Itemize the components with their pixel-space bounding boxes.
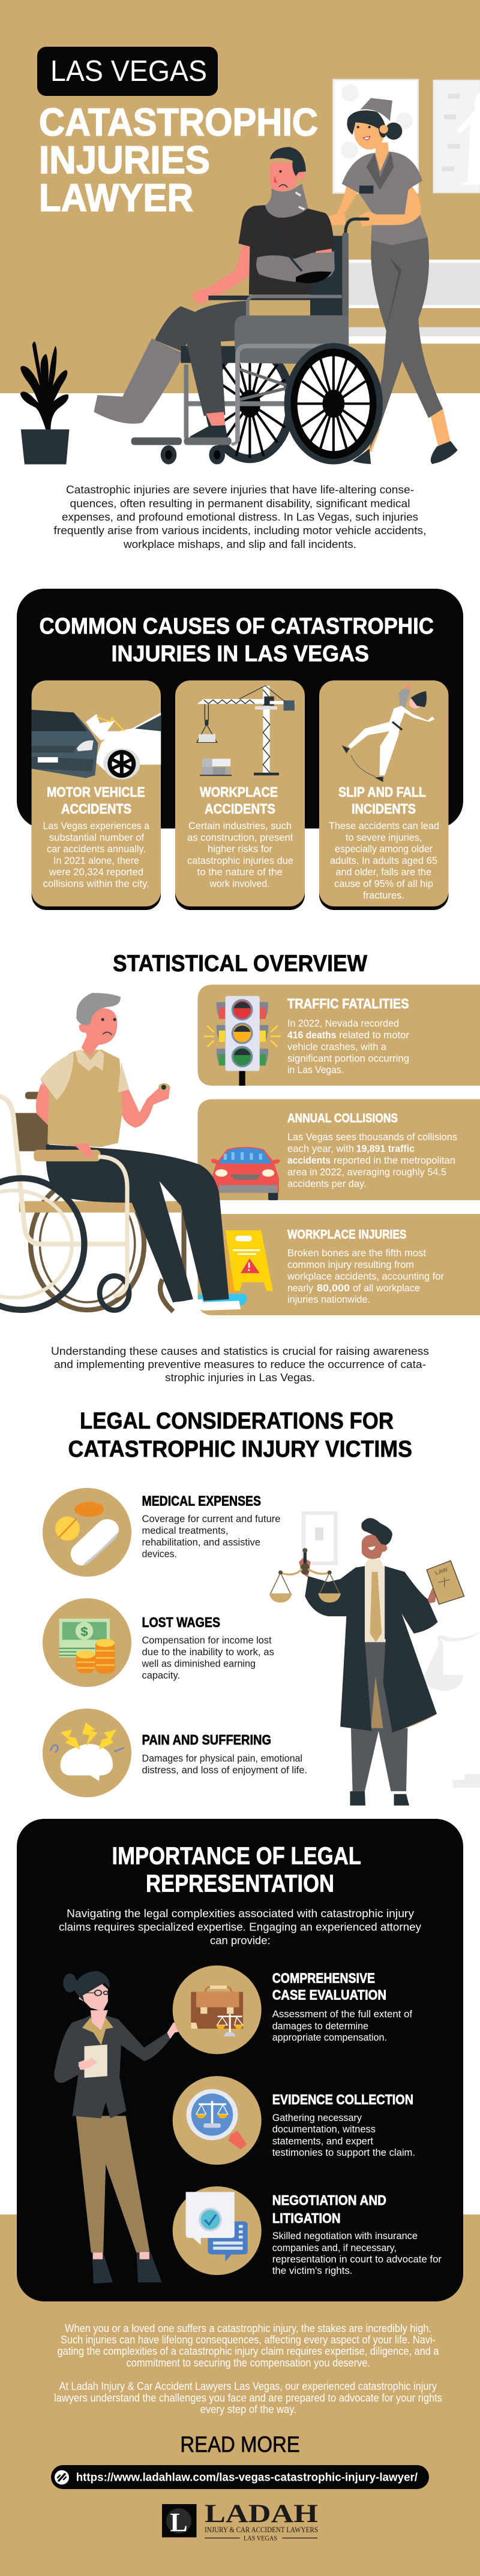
item text	[142, 1753, 307, 1776]
item text: Compensation for income lost	[142, 1635, 272, 1646]
text block: closing message: gating the complexities of a catastrophic injury claim requires expertise, diligence, and a	[58, 2345, 439, 2357]
stat title: ANNUAL COLLISIONS	[287, 1111, 398, 1125]
item title: MEDICAL EXPENSES	[142, 1493, 261, 1508]
logo wordmark: LADAH	[205, 2500, 318, 2528]
text block: introduction: Catastrophic injuries are severe injuries that have life-altering conse-	[66, 484, 414, 496]
panel intro text	[59, 1908, 421, 1947]
icon: caution sign	[198, 1230, 273, 1305]
card text: to the nature of the	[197, 866, 283, 878]
card title: INCIDENTS	[352, 801, 416, 817]
icon: car crash	[32, 710, 161, 779]
item: negotiation and litigation	[173, 2186, 442, 2276]
item text	[142, 1635, 274, 1681]
text block: awareness note: and implementing preventive measures to reduce the occurrence of cata-	[54, 1358, 426, 1370]
stat text: injuries nationwide.	[287, 1294, 370, 1305]
item title: LOST WAGES	[142, 1614, 220, 1630]
icon: construction crane	[197, 686, 295, 776]
item title: LITIGATION	[272, 2210, 341, 2226]
heading: COMMON CAUSES OF CATASTROPHIC	[40, 614, 434, 639]
text block: introduction	[54, 484, 426, 550]
item text: Assessment of the full extent of	[272, 2008, 412, 2020]
panel intro text: claims requires specialized expertise. Engaging an experienced attorney	[59, 1921, 421, 1933]
icon: link	[55, 2470, 69, 2484]
icon: briefcase	[173, 1965, 262, 2054]
card title	[47, 784, 145, 817]
icon: potted plant	[20, 342, 69, 465]
item title: NEGOTIATION AND	[272, 2192, 386, 2208]
card text: especially among older	[335, 843, 433, 855]
illustration: elderly man in wheelchair	[0, 993, 241, 1312]
card text	[43, 820, 150, 890]
item text: Skilled negotiation with insurance	[272, 2230, 418, 2241]
badge: Las Vegas: LAS VEGAS	[50, 55, 207, 88]
item title: CASE EVALUATION	[272, 1987, 386, 2002]
text block: closing message: lawyers understand the challenges you face and are prepared to advocate for your rights	[54, 2392, 442, 2404]
text block: introduction: frequently arise from various incidents, including motor vehicle accidents,	[54, 525, 426, 537]
text block: awareness note	[51, 1345, 429, 1384]
text block: closing message: every step of the way.	[200, 2403, 296, 2415]
text block: closing message: commitment to securing the compensation you deserve.	[126, 2357, 370, 2369]
item text: distress, and loss of enjoyment of life.	[142, 1764, 307, 1776]
item text: due to the inability to work, as	[142, 1646, 274, 1658]
item: pain and suffering	[43, 1709, 307, 1797]
card text: car accidents annually.	[47, 843, 146, 855]
card text: as construction, present	[187, 832, 293, 843]
heading: statistical overview: STATISTICAL OVERVIEW	[113, 951, 367, 977]
logo: Ladah	[162, 2500, 318, 2542]
card text: These accidents can lead	[329, 820, 439, 831]
card text: were 20,324 reported	[49, 866, 143, 878]
item text: appropriate compensation.	[272, 2032, 387, 2043]
item title	[272, 1971, 386, 2002]
illustration: woman attorney presenting	[54, 1971, 185, 2283]
item text	[272, 2230, 442, 2276]
stat text: of all workplace	[353, 1282, 420, 1294]
heading	[112, 1842, 361, 1897]
text block: awareness note: strophic injuries in Las Vegas.	[165, 1372, 315, 1384]
illustration: lawyer with scales and book	[269, 1513, 480, 1806]
stat text: Las Vegas sees thousands of collisions	[287, 1131, 457, 1143]
card title	[338, 784, 426, 817]
item: lost wages	[43, 1598, 274, 1687]
item text: the victim's rights.	[272, 2265, 353, 2276]
link pill: url	[51, 2465, 429, 2489]
card text: catastrophic injuries due	[187, 855, 293, 866]
card text: to severe injuries,	[346, 832, 422, 843]
heading: legal considerations: CATASTROPHIC INJURY VICTIMS	[68, 1436, 412, 1462]
item text: representation in court to advocate for	[272, 2253, 442, 2265]
title: INJURIES	[39, 138, 210, 182]
item title	[272, 2192, 386, 2226]
text block: awareness note: Understanding these causes and statistics is crucial for raising awareness	[51, 1345, 429, 1357]
stat text: 19,891 traffic	[356, 1143, 415, 1155]
stat text	[287, 1018, 409, 1075]
card text: In 2021 alone, there	[53, 855, 139, 866]
panel intro text: Navigating the legal complexities associated with catastrophic injury	[67, 1908, 414, 1920]
stat text: workplace accidents, accounting for	[287, 1271, 444, 1282]
link pill: url: https://www.ladahlaw.com/las-vegas-catastrophic-injury-lawyer/	[76, 2471, 418, 2484]
title	[39, 100, 318, 219]
item text	[272, 2112, 415, 2158]
text block: closing message: At Ladah Injury & Car Accident Lawyers Las Vegas, our experienced catastrophic injury	[59, 2380, 437, 2392]
icon: person falling	[342, 685, 434, 782]
card: slip and fall incidents	[319, 680, 449, 910]
item title: COMPREHENSIVE	[272, 1971, 375, 1986]
icon: pills	[43, 1488, 131, 1577]
icon: traffic light	[204, 996, 280, 1086]
stat text	[287, 1248, 444, 1305]
stat text: Broken bones are the fifth most	[287, 1248, 426, 1259]
text block: closing message	[54, 2322, 442, 2415]
illustration: nurse pushing patient in wheelchair	[94, 98, 458, 465]
stat text: In 2022, Nevada recorded	[287, 1018, 399, 1029]
text block: introduction: quences, often resulting in permanent disability, significant medical	[70, 498, 410, 510]
badge: Las Vegas	[37, 47, 218, 96]
stat text: 80,000	[317, 1282, 350, 1294]
panel background: tan footer	[0, 2215, 480, 2576]
card text: and older, falls are the	[336, 866, 431, 878]
illustration: hospital background	[333, 80, 480, 344]
stat title: WORKPLACE INJURIES	[287, 1228, 407, 1242]
title: LAWYER	[39, 176, 193, 219]
call to action: read more: READ MORE	[180, 2432, 300, 2457]
card text: cause of 95% of all hip	[334, 878, 433, 890]
heading	[40, 614, 434, 667]
logo mark: L	[170, 2508, 188, 2537]
stat title: TRAFFIC FATALITIES	[287, 996, 409, 1011]
text block: closing message: Such injuries can have lifelong consequences, affecting every aspect of your life. Navi-	[61, 2334, 436, 2346]
card title: SLIP AND FALL	[338, 784, 426, 800]
logo wordmark: INJURY & CAR ACCIDENT LAWYERS	[205, 2526, 318, 2534]
heading: REPRESENTATION	[146, 1870, 334, 1897]
title: CATASTROPHIC	[39, 100, 318, 144]
logo mark	[162, 2504, 197, 2537]
icon: red car	[211, 1147, 280, 1200]
card title: ACCIDENTS	[205, 801, 275, 817]
wheelchair front	[131, 296, 383, 465]
item text: Damages for physical pain, emotional	[142, 1753, 302, 1764]
wheelchair back	[184, 219, 368, 459]
logo wordmark	[205, 2500, 318, 2542]
stat text: accidents per day.	[287, 1178, 366, 1189]
item text: documentation, witness	[272, 2123, 376, 2135]
card text: substantial number of	[49, 832, 144, 843]
patient	[94, 147, 335, 438]
item title: EVIDENCE COLLECTION	[272, 2092, 413, 2107]
stat text	[287, 1131, 457, 1189]
heading: legal considerations: LEGAL CONSIDERATIONS FOR	[80, 1408, 394, 1434]
item text: damages to determine	[272, 2020, 368, 2032]
stat text: accidents	[287, 1155, 331, 1166]
item text: Coverage for current and future	[142, 1513, 281, 1524]
stat text: area in 2022, averaging roughly 54.5	[287, 1167, 446, 1177]
panel: workplace injuries	[198, 1214, 480, 1315]
card text: Las Vegas experiences a	[43, 820, 150, 831]
card text: adults. In adults aged 65	[330, 855, 437, 866]
heading: IMPORTANCE OF LEGAL	[112, 1842, 361, 1870]
item title: PAIN AND SUFFERING	[142, 1732, 271, 1748]
card title: WORKPLACE	[200, 784, 278, 800]
panel: traffic fatalities	[198, 984, 480, 1086]
item: comprehensive case evaluation	[173, 1965, 412, 2054]
stat text: common injury resulting from	[287, 1259, 414, 1270]
item text	[272, 2008, 412, 2043]
card text	[187, 820, 293, 890]
panel: hero	[0, 0, 480, 465]
icon: speech bubbles	[173, 2186, 262, 2275]
item text: rehabilitation, and assistive	[142, 1536, 260, 1548]
card text: higher risks for	[208, 843, 272, 855]
stat text: each year, with	[287, 1143, 354, 1155]
illustration: lawyer with scales and book: LAW	[434, 1566, 449, 1576]
panel: annual collisions	[198, 1099, 480, 1200]
stat text: in Las Vegas.	[287, 1064, 344, 1075]
icon: brain with lightning	[43, 1709, 131, 1797]
card text: Certain industries, such	[188, 820, 292, 831]
text block: introduction: workplace mishaps, and slip and fall incidents.	[123, 538, 356, 550]
item text: statements, and expert	[272, 2135, 373, 2147]
item text: well as diminished earning	[142, 1658, 256, 1669]
card title: ACCIDENTS	[61, 801, 131, 817]
item text	[142, 1513, 281, 1560]
panel: common causes	[17, 589, 463, 910]
icon: magnifying glass with scales	[173, 2076, 262, 2165]
icon: money	[43, 1598, 131, 1687]
heading: legal considerations	[68, 1408, 412, 1462]
logo wordmark: LAS VEGAS	[244, 2533, 277, 2542]
item text: companies and, if necessary,	[272, 2242, 397, 2253]
item text: medical treatments,	[142, 1525, 228, 1536]
item text: Gathering necessary	[272, 2112, 362, 2123]
heading: INJURIES IN LAS VEGAS	[112, 641, 369, 667]
panel intro text: can provide:	[210, 1935, 271, 1947]
card title: MOTOR VEHICLE	[47, 784, 145, 800]
card text: collisions within the city.	[43, 878, 149, 890]
stat text: vehicle crashes, with a	[287, 1041, 387, 1053]
item: evidence collection	[173, 2076, 415, 2165]
item text: testimonies to support the claim.	[272, 2147, 415, 2158]
panel: importance of legal representation	[17, 1819, 463, 2301]
stat text: related to motor	[339, 1029, 409, 1041]
card text: work involved.	[209, 878, 270, 890]
item: medical expenses	[43, 1488, 281, 1577]
card text: fractures.	[363, 890, 404, 901]
stat text: significant portion occurring	[287, 1053, 409, 1064]
card title	[200, 784, 278, 817]
item text: devices.	[142, 1548, 177, 1560]
text block: closing message: When you or a loved one suffers a catastrophic injury, the stakes are incredibly high.	[65, 2322, 431, 2334]
stat text: reported in the metropolitan	[334, 1155, 455, 1166]
stat text: 416 deaths	[287, 1029, 336, 1041]
card: motor vehicle accidents	[32, 680, 161, 910]
card text	[329, 820, 439, 901]
item text: capacity.	[142, 1670, 180, 1681]
nurse	[329, 98, 458, 464]
stat text: nearly	[287, 1282, 313, 1294]
icon: money: $	[80, 1625, 88, 1639]
text block: introduction: expenses, and profound emotional distress. In Las Vegas, such injuries	[62, 511, 418, 523]
card: workplace accidents	[175, 680, 305, 910]
